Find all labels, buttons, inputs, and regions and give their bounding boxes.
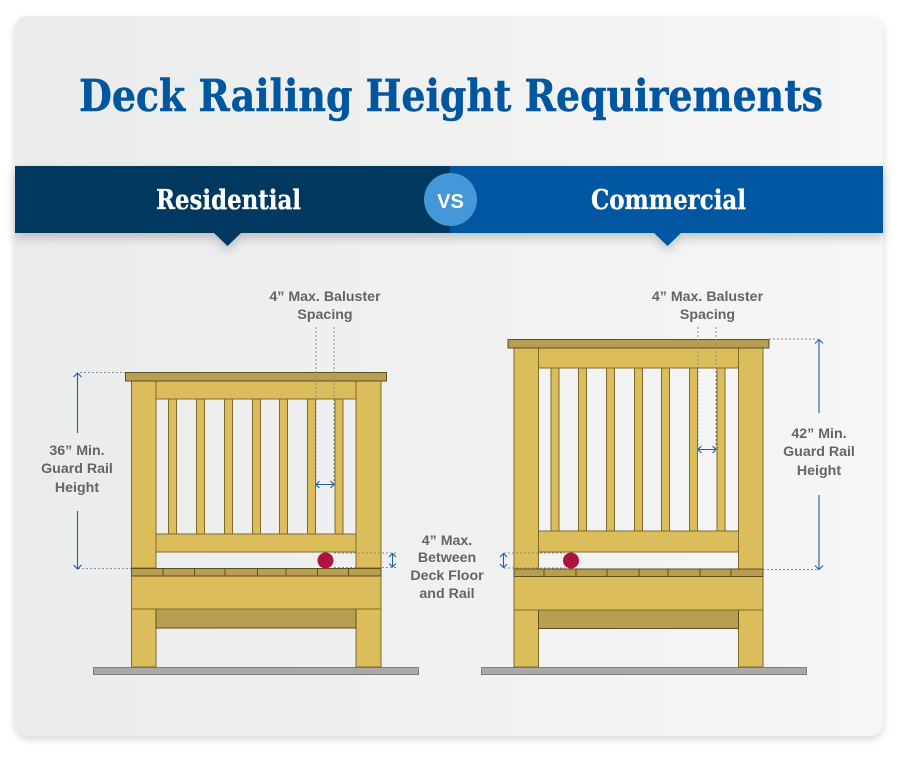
ball [563, 552, 579, 568]
gap arrow [500, 554, 507, 568]
heading: residential: Residential [156, 185, 301, 216]
banner: commercial [450, 166, 883, 246]
label: commercial height: Height [797, 463, 841, 479]
label: residential baluster spacing: Spacing [297, 307, 353, 323]
label: gap between deck floor and rail: and Rail [419, 586, 475, 602]
railing diagram: commercial [482, 327, 823, 674]
banner: residential vs commercial [15, 166, 883, 246]
label: residential height: Guard Rail [41, 461, 113, 477]
label: residential height: 36” Min. [49, 443, 105, 459]
ground slab [94, 668, 418, 674]
fascia [514, 576, 763, 610]
banner: residential [15, 166, 450, 246]
height arrow [74, 373, 82, 569]
label: gap between deck floor and rail: Between [418, 550, 476, 566]
under beam [538, 610, 738, 628]
height guides [78, 372, 398, 568]
under beam [156, 609, 356, 628]
label: gap between deck floor and rail: 4” Max. [422, 533, 472, 549]
label: residential height: Height [55, 480, 99, 496]
label: residential baluster spacing: 4” Max. Baluster [269, 289, 381, 305]
label: gap between deck floor and rail: Deck Floor [410, 568, 484, 584]
vs badge [424, 173, 477, 226]
balusters [168, 399, 343, 534]
deck boards [132, 568, 381, 576]
bottom rail [538, 531, 738, 552]
height arrow [815, 340, 823, 570]
baluster spacing arrow [698, 446, 716, 453]
top rail [156, 381, 356, 399]
label: commercial height: 42” Min. [791, 426, 847, 442]
baluster spacing guides [698, 327, 716, 449]
top rail [538, 348, 738, 368]
baluster spacing guides [316, 327, 334, 484]
legs [514, 610, 763, 667]
posts [514, 348, 763, 569]
label: commercial height: Guard Rail [783, 444, 855, 460]
label: commercial baluster spacing: Spacing [680, 307, 735, 323]
legs [132, 609, 381, 667]
label: commercial baluster spacing: 4” Max. Baluster [652, 289, 764, 305]
ball [318, 552, 334, 568]
fascia [132, 576, 381, 609]
cap rail [126, 372, 386, 381]
cap rail [508, 340, 769, 348]
heading: commercial: Commercial [591, 185, 746, 216]
deck boards [514, 569, 763, 576]
bottom rail [156, 534, 356, 552]
balusters [551, 368, 725, 531]
ground slab [482, 668, 806, 674]
railing diagram: residential [74, 327, 418, 674]
baluster spacing arrow [316, 481, 334, 488]
height guides [504, 339, 818, 570]
vs badge: VS [437, 191, 464, 213]
posts [132, 381, 381, 568]
gap arrow [389, 554, 396, 567]
